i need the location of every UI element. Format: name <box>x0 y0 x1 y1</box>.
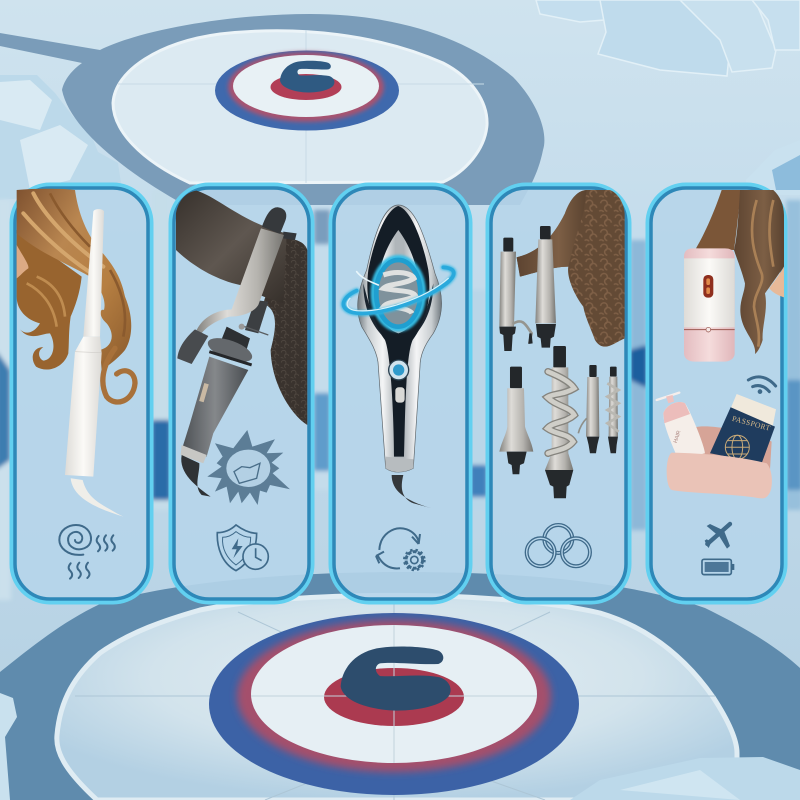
curly brown hair <box>517 190 625 347</box>
swirling cyan orbit <box>343 267 454 313</box>
mini curler device <box>684 248 735 362</box>
curling iron <box>177 207 297 497</box>
toiletry bottle: HAIR <box>673 430 683 444</box>
top curling stone <box>280 61 334 93</box>
panel 5: travel mini curler <box>648 185 785 602</box>
target rings <box>215 50 399 130</box>
bottom curling stone <box>341 647 451 711</box>
top curling target <box>0 14 544 205</box>
brown hair <box>696 190 784 354</box>
white ice <box>113 31 487 183</box>
glowing heat window <box>373 257 424 329</box>
pouch back rim <box>695 426 772 470</box>
barrel with clamp <box>499 238 533 351</box>
wide cone barrel <box>499 367 533 474</box>
panel 2: professional curling iron <box>171 185 312 602</box>
brown wavy hair <box>17 189 135 402</box>
icon: interlocked rings <box>527 525 590 566</box>
icon: wifi <box>748 377 776 394</box>
background: ice blocks <box>0 0 800 600</box>
dark straight hair <box>176 191 287 303</box>
thin clamp barrel <box>578 365 599 453</box>
boarding pass <box>730 394 776 427</box>
white curling wand <box>65 209 123 517</box>
panel 1: thin wand <box>12 185 151 602</box>
panel 4: interchangeable barrels <box>488 185 629 602</box>
toiletry bottle <box>657 393 705 460</box>
passport: PASSPORT <box>731 414 772 433</box>
curly dark hair <box>263 238 307 425</box>
large spiral barrel <box>545 346 574 498</box>
panel 3: chrome styler <box>331 185 470 602</box>
white ice <box>57 595 737 800</box>
bottom curling target <box>0 572 800 800</box>
dark ring <box>0 572 800 800</box>
pink travel pouch <box>667 453 772 498</box>
icon: battery <box>702 559 734 575</box>
dark ring and lane <box>0 14 544 205</box>
thin spiral barrel <box>607 367 619 453</box>
target rings <box>209 613 579 795</box>
icon: spiral with heat waves <box>59 525 115 579</box>
icon: shield and clock <box>217 525 268 571</box>
chrome device body <box>358 205 442 508</box>
icon: rotation arrows and gear <box>376 528 424 570</box>
passport <box>710 407 775 463</box>
second barrel <box>535 226 556 348</box>
icon: broken hair burst <box>207 430 290 505</box>
bottom ice blocks <box>0 693 800 800</box>
icon: airplane <box>705 524 730 549</box>
